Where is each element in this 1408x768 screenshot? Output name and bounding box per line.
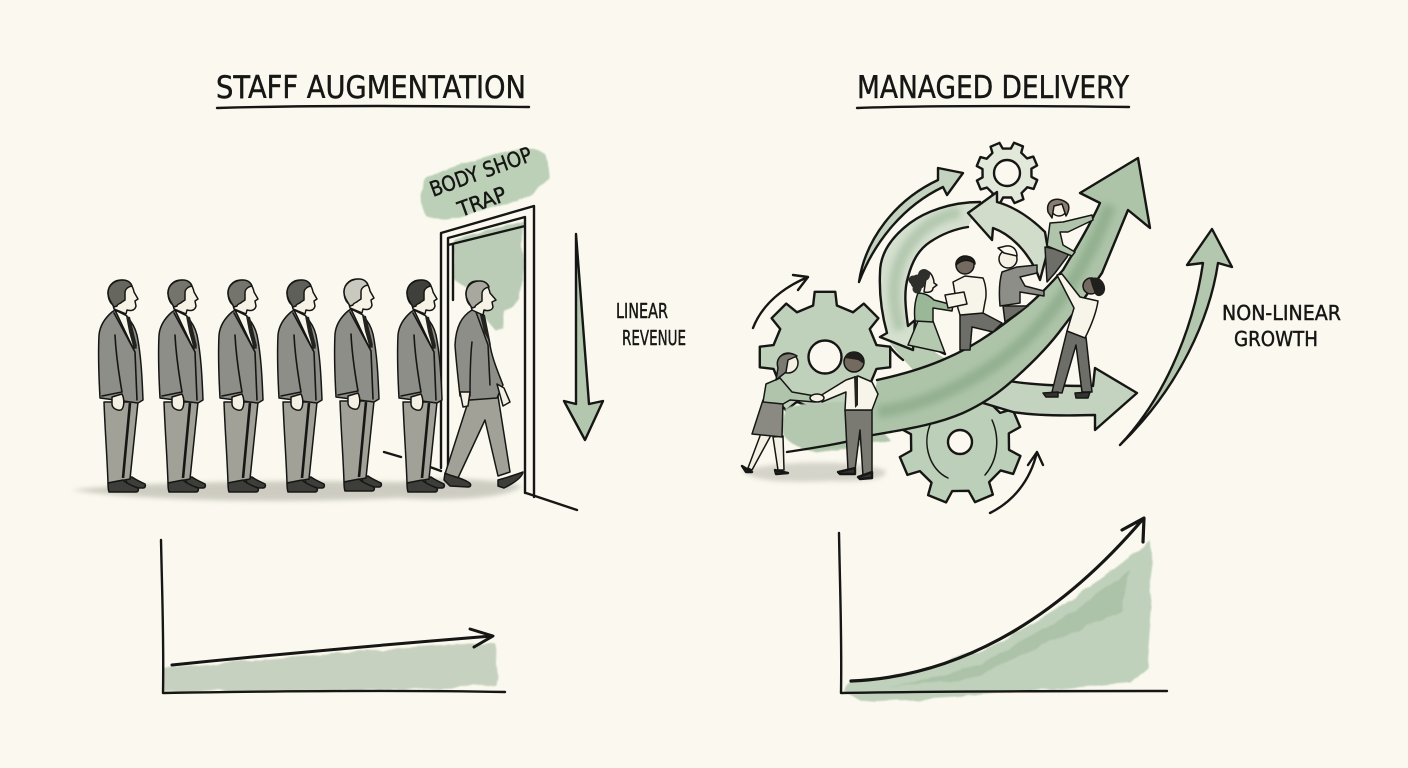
arrow: curved top	[859, 168, 963, 282]
man shaking hands	[810, 352, 878, 479]
blob: green wash behind handshake	[782, 403, 890, 452]
man 4 in queue	[278, 280, 324, 492]
arrow: small black bottom	[990, 452, 1043, 513]
people: handshake pair	[742, 352, 878, 479]
arrow: linear revenue down	[564, 234, 603, 440]
sign: body shop trap	[422, 143, 549, 222]
man 6 in queue	[398, 280, 444, 492]
arrow: horizontal right	[973, 368, 1137, 430]
man with cap	[998, 246, 1044, 322]
illustration: queue entering door	[72, 143, 577, 510]
arrow: small black top left	[753, 275, 808, 328]
gear: big left	[760, 292, 890, 422]
arrow: circular loop, top head	[968, 192, 1048, 280]
walking man	[444, 281, 523, 488]
door: body shop trap	[384, 206, 577, 510]
label: non-linear growth: NON-LINEAR	[1222, 301, 1341, 325]
people: inner team	[908, 199, 1105, 398]
arrow: circular loop, lower arc	[888, 325, 950, 372]
gear: bottom	[880, 362, 1040, 522]
ground shadow: handshake	[742, 462, 886, 482]
label: non-linear growth	[1222, 301, 1341, 351]
heading: staff augmentation: STAFF AUGMENTATION	[216, 70, 526, 106]
man 5 in queue	[335, 279, 381, 491]
label: linear revenue	[616, 299, 686, 350]
arrow: non-linear growth	[1120, 229, 1232, 445]
woman climbing	[1045, 199, 1093, 282]
label: linear revenue: LINEAR	[616, 299, 668, 323]
arrow: circular loop, left arc	[880, 202, 980, 360]
sign: body shop trap: BODY SHOP	[427, 143, 535, 202]
illustration: managed delivery cycle	[742, 133, 1150, 522]
chart: linear revenue	[161, 540, 505, 693]
arrow: big growth swoosh	[787, 158, 1150, 452]
woman shaking hands	[742, 353, 815, 474]
woman with curly hair	[908, 269, 953, 353]
heading: managed delivery: MANAGED DELIVERY	[857, 70, 1129, 106]
man 3 in queue	[219, 280, 265, 492]
label: linear revenue: REVENUE	[622, 326, 686, 350]
man 2 in queue	[159, 280, 205, 492]
man 1 in queue	[99, 280, 145, 492]
sign: body shop trap: TRAP	[454, 182, 510, 222]
gear: top	[967, 133, 1047, 213]
man with laptop	[945, 256, 1002, 350]
label: non-linear growth: GROWTH	[1234, 327, 1318, 351]
ground shadow	[72, 479, 522, 501]
man on arrow	[1043, 274, 1105, 398]
chart: non-linear growth	[839, 518, 1167, 703]
